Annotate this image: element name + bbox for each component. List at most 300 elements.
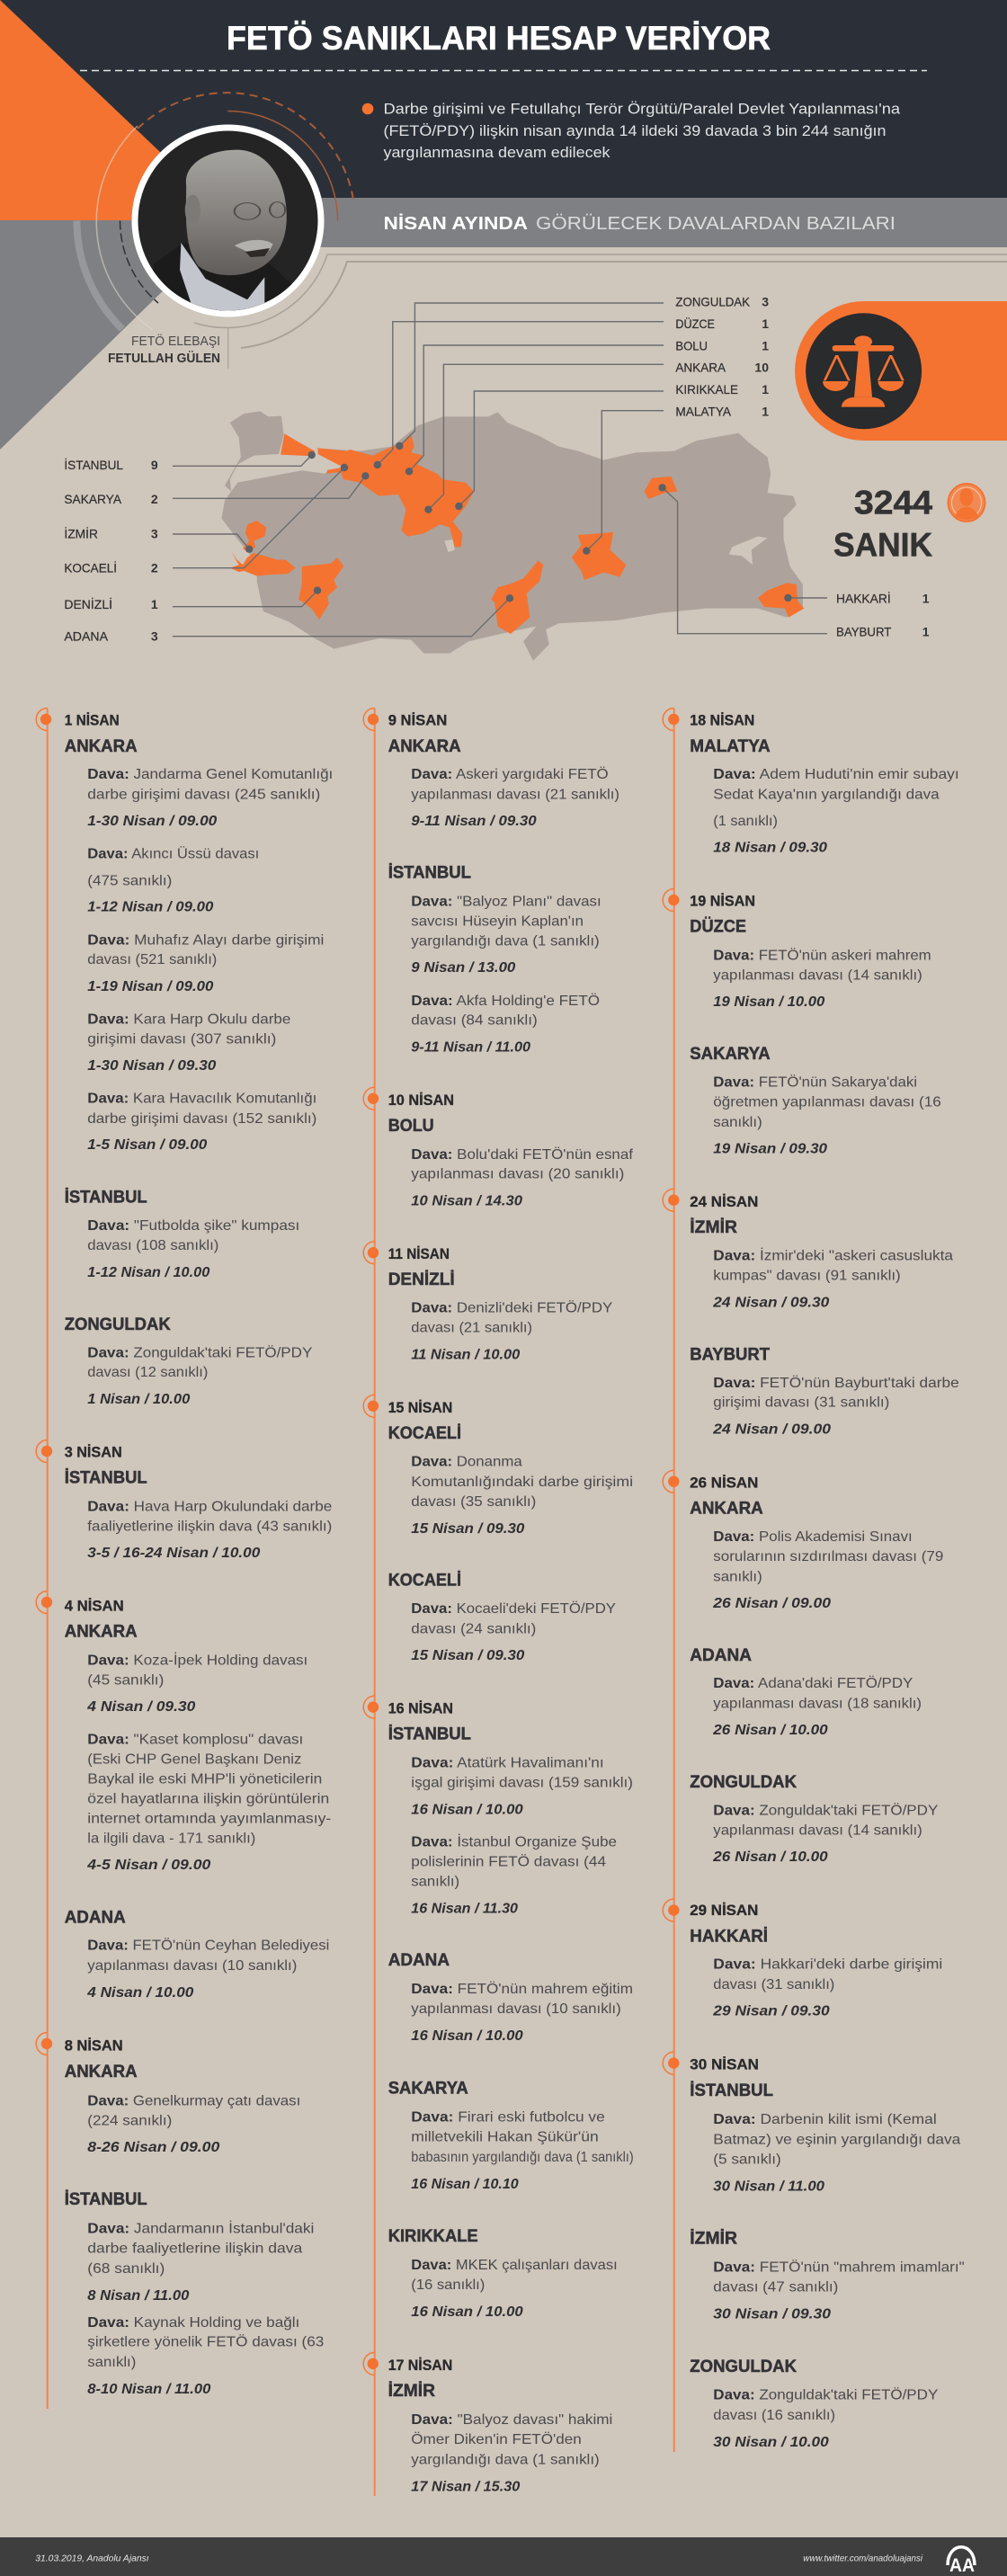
case: Dava: MKEK çalışanları davası: [411, 2258, 618, 2273]
city: Kocaeli: KOCAELİ: [388, 1424, 461, 1443]
case: yapılanması davası (18 sanıklı): [713, 1696, 922, 1712]
map leader lines: [173, 303, 827, 637]
date: 16 NİSAN: [388, 1699, 453, 1716]
caption: Fetullah Gülen: [108, 328, 228, 369]
case: Dava: Firari eski futbolcu ve: [411, 2109, 605, 2125]
case: Komutanlığındaki darbe girişimi: [411, 1475, 633, 1490]
case: davası (21 sanıklı): [411, 1321, 532, 1336]
timeline line: [673, 709, 675, 2452]
marker: [663, 1899, 680, 1921]
day: 4 Nisan: [36, 1591, 331, 2001]
legend: north provinces: BOLU: [675, 338, 708, 352]
date: 29 NİSAN: [690, 1902, 758, 1919]
case: 1-12 Nisan / 10.00: [87, 1265, 209, 1280]
city: Kocaeli: KOCAELİ: [388, 1571, 461, 1590]
case: yapılanması davası (14 sanıklı): [713, 968, 922, 984]
city: Zonguldak: ZONGULDAK: [690, 2358, 797, 2376]
case: [87, 1012, 290, 1074]
case: Dava: Kara Harp Okulu darbe: [87, 1012, 290, 1027]
marker: [36, 1440, 52, 1462]
case: Dava: FETÖ'nün "mahrem imamları": [713, 2260, 965, 2276]
case: [87, 932, 324, 994]
case: (16 sanıklı): [411, 2277, 485, 2293]
stat: 3244 sanık: 3244: [854, 485, 932, 521]
date: 15 NİSAN: [388, 1399, 452, 1416]
city: İstanbul: İSTANBUL: [388, 1725, 471, 1744]
case: [87, 1218, 299, 1280]
legend: west provinces: KOCAELİ: [64, 560, 117, 575]
case: [411, 1755, 633, 1817]
date: 30 NİSAN: [690, 2056, 759, 2073]
case: Dava: FETÖ'nün askeri mahrem: [713, 947, 931, 963]
case: (475 sanıklı): [87, 873, 172, 888]
intro text block: yargılanmasına devam edilecek: [383, 145, 610, 161]
legend: north provinces: 1: [762, 382, 769, 397]
case: 10 Nisan / 14.30: [411, 1194, 522, 1208]
case: davası (31 sanıklı): [713, 1977, 834, 1992]
city: Ankara: ANKARA: [65, 1622, 138, 1641]
intro text block: (FETÖ/PDY) ilişkin nisan ayında 14 ildeki 39 davada 3 bin 244 sanığın: [383, 123, 887, 139]
city: Bolu: BOLU: [388, 1117, 434, 1136]
legend: east provinces: BAYBURT: [836, 625, 892, 639]
city: İzmir: İZMİR: [690, 2229, 737, 2248]
icon: person: [948, 484, 985, 521]
case: 29 Nisan / 09.30: [712, 2003, 830, 2019]
case: [712, 1375, 959, 1438]
case: 17 Nisan / 15.30: [411, 2479, 520, 2494]
case: Dava: Hakkari'deki darbe girişimi: [713, 1957, 942, 1973]
case: [411, 2109, 634, 2192]
case: Dava: Polis Akademisi Sınavı: [713, 1529, 913, 1545]
case: Batmaz) ve eşinin yargılandığı dava: [713, 2132, 960, 2147]
case: Dava: "Balyoz davası" hakimi: [411, 2412, 612, 2428]
map of Turkey: [221, 411, 804, 661]
case: Dava: FETÖ'nün mahrem eğitim: [411, 1981, 633, 1997]
intro text block: [362, 102, 901, 161]
case: Dava: Donanma: [411, 1455, 522, 1470]
case: davası (24 sanıklı): [411, 1621, 536, 1636]
marker: [663, 1189, 680, 1211]
case: davası (35 sanıklı): [411, 1494, 536, 1510]
footer source: 31.03.2019, Anadolu Ajansı: [35, 2554, 149, 2564]
case: [87, 1344, 313, 1407]
case: Dava: "Futbolda şike" kumpası: [87, 1218, 299, 1234]
city: Adana: ADANA: [65, 1908, 126, 1927]
city: Ankara: ANKARA: [65, 737, 138, 756]
case: sorularının sızdırılması davası (79: [713, 1549, 943, 1564]
city: İstanbul: İSTANBUL: [690, 2081, 773, 2100]
case: 16 Nisan / 11.30: [411, 1902, 518, 1917]
case: Dava: Jandarmanın İstanbul'daki: [87, 2219, 314, 2236]
icon: scales of justice: [806, 313, 922, 429]
case: Dava: "Balyoz Planı" davası: [411, 894, 602, 910]
case: [86, 1651, 307, 1715]
case: [712, 1957, 942, 2019]
column 3 timeline: [663, 709, 965, 2452]
city: Ankara: ANKARA: [690, 1499, 763, 1518]
case: 1 Nisan / 10.00: [87, 1392, 190, 1407]
dashed divider: [80, 70, 927, 72]
legend: north provinces: 1: [762, 316, 769, 331]
date: 9 NİSAN: [388, 712, 447, 729]
case: [411, 1832, 617, 1917]
marker: [363, 1696, 379, 1718]
city: Adana: ADANA: [690, 1646, 752, 1665]
case: Dava: İstanbul Organize Şube: [411, 1832, 617, 1850]
case: Dava: Adana'daki FETÖ/PDY: [713, 1675, 913, 1691]
stat: 3244 sanık: [833, 484, 985, 563]
case: [87, 767, 333, 829]
day: 11 Nisan: [363, 1242, 613, 1363]
case: davası (16 sanıklı): [713, 2408, 835, 2423]
case: davası (108 sanıklı): [87, 1238, 218, 1253]
case: davası (84 sanıklı): [411, 1013, 538, 1029]
legend: north provinces: DÜZCE: [675, 316, 715, 331]
case: işgal girişimi davası (159 sanıklı): [411, 1775, 633, 1790]
case: yapılanması davası (10 sanıklı): [411, 2001, 621, 2017]
day: 29 Nisan: [663, 1899, 942, 2019]
legend: east provinces: [836, 591, 930, 639]
date: 17 NİSAN: [388, 2357, 452, 2374]
case: öğretmen yapılanması davası (16: [713, 1095, 941, 1110]
date: 3 NİSAN: [65, 1443, 122, 1460]
intro text block: Darbe girişimi ve Fetullahçı Terör Örgütü/Paralel Devlet Yapılanması'na: [383, 102, 901, 118]
case: Dava: Koza-İpek Holding davası: [87, 1651, 307, 1668]
city: Hakkari: HAKKARİ: [690, 1927, 768, 1946]
case: [411, 766, 619, 829]
date: 24 NİSAN: [690, 1193, 758, 1210]
marker: [363, 2352, 379, 2375]
legend: west provinces: İSTANBUL: [64, 457, 123, 472]
case: Dava: Genelkurmay çatı davası: [87, 2093, 300, 2108]
legend: north provinces: ANKARA: [675, 361, 726, 375]
case: 1-30 Nisan / 09.00: [87, 814, 217, 829]
case: 1-30 Nisan / 09.30: [87, 1058, 216, 1074]
legend: north provinces: 1: [762, 338, 769, 352]
legend: west provinces: 3: [151, 526, 158, 540]
case: Dava: Askeri yargıdaki FETÖ: [411, 766, 609, 782]
case: 24 Nisan / 09.00: [712, 1422, 831, 1438]
legend: west provinces: 2: [151, 492, 158, 506]
day: 17 Nisan: [363, 2352, 612, 2494]
case: 1-19 Nisan / 09.00: [87, 979, 213, 994]
case: 1-5 Nisan / 09.00: [87, 1137, 207, 1153]
case: 30 Nisan / 11.00: [713, 2179, 824, 2194]
legend: west provinces: 1: [151, 597, 158, 611]
case: 19 Nisan / 10.00: [713, 994, 824, 1010]
case: [713, 947, 931, 1010]
case: 26 Nisan / 09.00: [712, 1596, 831, 1611]
city: İstanbul: İSTANBUL: [65, 1469, 147, 1487]
case: 4 Nisan / 10.00: [86, 1985, 193, 2001]
legend: east provinces: 1: [922, 592, 930, 606]
case: Dava: Kaynak Holding ve bağlı: [87, 2315, 299, 2331]
case: Dava: Zonguldak'taki FETÖ/PDY: [87, 1344, 313, 1360]
case: yargılandığı dava (1 sanıklı): [411, 2453, 600, 2467]
case: Dava: İzmir'deki "askeri casuslukta: [713, 1246, 953, 1263]
date: 1 NİSAN: [65, 712, 120, 729]
icon: AA logo: AA: [949, 2555, 975, 2576]
city: İstanbul: İSTANBUL: [65, 1188, 147, 1207]
case: özel hayatlarına ilişkin görüntülerin: [87, 1791, 329, 1806]
case: şirketlere yönelik FETÖ davası (63: [87, 2334, 324, 2350]
case: 9-11 Nisan / 11.00: [411, 1039, 530, 1056]
date: 18 NİSAN: [690, 712, 754, 729]
case: [411, 894, 602, 976]
case: [712, 1246, 953, 1311]
legend: north provinces: MALATYA: [675, 404, 732, 418]
legend: north provinces: 3: [762, 295, 769, 309]
case: [411, 2258, 618, 2320]
case: Dava: Jandarma Genel Komutanlığı: [87, 767, 333, 782]
legend: east provinces: HAKKARİ: [836, 591, 891, 606]
marker: [36, 2032, 52, 2055]
case: la ilgili dava - 171 sanıklı): [87, 1831, 255, 1847]
case: Dava: "Kaset komplosu" davası: [87, 1733, 303, 1748]
day: 19 Nisan: [663, 888, 941, 1156]
city: İstanbul: İSTANBUL: [65, 2190, 147, 2209]
case: [713, 2260, 965, 2322]
day: 30 Nisan: [663, 2052, 965, 2450]
case: faaliyetlerine ilişkin dava (43 sanıklı): [87, 1520, 332, 1535]
marker: [663, 709, 680, 730]
case: Dava: Adem Huduti'nin emir subayı: [713, 767, 959, 782]
case: 19 Nisan / 09.30: [713, 1142, 827, 1156]
case: Dava: Darbenin kilit ismi (Kemal: [713, 2112, 937, 2127]
case: [411, 1146, 634, 1208]
legend: west provinces: 3: [151, 629, 158, 644]
case: Dava: Atatürk Havalimanı'nı: [411, 1755, 604, 1771]
case: [411, 1455, 633, 1537]
case: 4-5 Nisan / 09.00: [86, 1858, 210, 1873]
case: darbe girişimi davası (152 sanıklı): [87, 1111, 316, 1127]
map: Lake Van: [729, 537, 768, 565]
subtitle: GÖRÜLECEK DAVALARDAN BAZILARI: [536, 214, 896, 234]
grey left wedge: [0, 220, 252, 450]
date: 4 NİSAN: [65, 1597, 124, 1614]
case: kumpas" davası (91 sanıklı): [713, 1269, 901, 1284]
city: İzmir: İZMİR: [388, 2382, 435, 2401]
date: 26 NİSAN: [690, 1474, 758, 1491]
day: 3 Nisan: [36, 1440, 332, 1561]
date: 11 NİSAN: [388, 1245, 450, 1262]
city: Kırıkkale: KIRIKKALE: [388, 2227, 478, 2246]
subtitle: [383, 213, 896, 234]
case: 9-11 Nisan / 09.30: [411, 814, 537, 829]
case: 4 Nisan / 09.30: [86, 1699, 195, 1715]
legend: west provinces: SAKARYA: [64, 492, 122, 506]
case: 11 Nisan / 10.00: [411, 1347, 520, 1363]
marker: [36, 1591, 52, 1613]
case: Dava: FETÖ'nün Sakarya'daki: [713, 1074, 917, 1090]
city: Ankara: ANKARA: [388, 737, 461, 756]
date: 10 NİSAN: [388, 1092, 454, 1109]
marker: [36, 709, 51, 730]
case: [411, 993, 600, 1056]
decorative rings: [76, 93, 1007, 348]
day: 24 Nisan: [663, 1189, 959, 1438]
city: Adana: ADANA: [388, 1951, 450, 1970]
case: yapılanması davası (14 sanıklı): [713, 1823, 922, 1838]
header dark panel: [0, 0, 1007, 198]
case: [713, 2387, 939, 2450]
map location dots: [245, 442, 792, 602]
orange corner triangle: [0, 0, 232, 220]
marker: [663, 888, 680, 912]
case: 16 Nisan / 10.00: [411, 2304, 523, 2320]
case: [87, 2093, 300, 2155]
legend: north provinces: ZONGULDAK: [675, 295, 751, 309]
case: 3-5 / 16-24 Nisan / 10.00: [87, 1546, 260, 1561]
case: [411, 2412, 612, 2494]
column 2 timeline: [363, 709, 634, 2496]
case: Dava: Denizli'deki FETÖ/PDY: [411, 1300, 613, 1316]
caption: Fetullah Gülen: FETÖ ELEBAŞI: [131, 333, 220, 349]
case: Dava: Muhafız Alayı darbe girişimi: [87, 932, 324, 948]
day: 18 Nisan: [663, 709, 959, 856]
legend: north provinces: 1: [762, 404, 769, 418]
timeline line: [47, 709, 49, 2409]
case: [712, 1529, 943, 1611]
case: sanıklı): [713, 1569, 762, 1584]
case: Dava: Bolu'daki FETÖ'nün esnaf: [411, 1146, 634, 1163]
map: Anatolia land: [221, 412, 803, 661]
legend: west provinces: İZMİR: [64, 525, 98, 540]
case: 8-10 Nisan / 11.00: [87, 2382, 210, 2397]
stat: 3244 sanık: SANIK: [833, 526, 932, 563]
case: [87, 2315, 324, 2397]
case: (5 sanıklı): [713, 2153, 781, 2168]
case: Dava: FETÖ'nün Bayburt'taki darbe: [713, 1375, 959, 1391]
city: Bayburt: BAYBURT: [690, 1345, 770, 1364]
case: [87, 845, 259, 915]
case: [713, 767, 959, 856]
case: internet ortamında yayımlanmasıy-: [87, 1812, 331, 1827]
case: 16 Nisan / 10.00: [411, 2028, 523, 2044]
case: [712, 1675, 922, 1738]
case: 15 Nisan / 09.30: [411, 1521, 524, 1537]
case: darbe faaliyetlerine ilişkin dava: [87, 2242, 302, 2257]
case: 18 Nisan / 09.30: [713, 841, 827, 856]
case: [87, 2219, 314, 2304]
case: Dava: Zonguldak'taki FETÖ/PDY: [713, 1803, 939, 1819]
case: sanıklı): [713, 1115, 762, 1130]
case: sanıklı): [87, 2355, 136, 2370]
case: Dava: Akfa Holding'e FETÖ: [411, 993, 600, 1009]
case: girişimi davası (31 sanıklı): [713, 1395, 889, 1411]
case: Baykal ile eski MHP'li yöneticilerin: [87, 1771, 322, 1787]
case: [411, 1981, 633, 2044]
day: 26 Nisan: [663, 1470, 943, 1865]
case: 16 Nisan / 10.10: [411, 2177, 519, 2192]
city: Zonguldak: ZONGULDAK: [690, 1773, 797, 1792]
case: [87, 1499, 332, 1561]
case: davası (47 sanıklı): [713, 2280, 838, 2295]
day: 10 Nisan: [363, 1087, 634, 1208]
case: (68 sanıklı): [87, 2261, 165, 2277]
legend: east provinces: 1: [922, 625, 930, 639]
legend: west provinces: ADANA: [64, 629, 109, 644]
marker: [663, 2052, 680, 2074]
title: FETÖ SANIKLARI HESAP VERİYOR: [227, 20, 771, 57]
day: 9 Nisan: [363, 709, 619, 1056]
case: darbe girişimi davası (245 sanıklı): [87, 787, 320, 802]
timeline line: [374, 709, 376, 2496]
case: polislerinin FETÖ davası (44: [411, 1853, 606, 1869]
case: 8-26 Nisan / 09.00: [87, 2140, 219, 2155]
case: Sedat Kaya'nın yargılandığı dava: [713, 787, 940, 802]
day: 8 Nisan: [36, 2032, 324, 2397]
case: [411, 1600, 616, 1663]
case: 8 Nisan / 11.00: [87, 2288, 189, 2304]
case: Dava: Kocaeli'deki FETÖ/PDY: [411, 1600, 616, 1617]
city: İzmir: İZMİR: [690, 1218, 737, 1237]
city: Ankara: ANKARA: [65, 2063, 138, 2081]
case: davası (521 sanıklı): [87, 952, 217, 967]
case: 1-12 Nisan / 09.00: [87, 900, 213, 915]
case: (224 sanıklı): [87, 2113, 172, 2128]
day: 15 Nisan: [363, 1395, 633, 1663]
case: yapılanması davası (20 sanıklı): [411, 1167, 624, 1182]
case: Ömer Diken'in FETÖ'den: [411, 2431, 582, 2447]
case: [87, 1092, 316, 1153]
legend: north provinces: KIRIKKALE: [675, 382, 738, 397]
footer bar: [0, 2537, 1007, 2576]
city: Sakarya: SAKARYA: [388, 2079, 468, 2099]
marker: [363, 709, 379, 730]
case: [86, 1938, 329, 2001]
map: Thrace land: [225, 411, 284, 492]
case: savcısı Hüseyin Kaplan'ın: [411, 914, 584, 929]
icon: AA logo: [948, 2547, 975, 2576]
city: Zonguldak: ZONGULDAK: [65, 1315, 171, 1334]
marker: [363, 1242, 379, 1264]
marker: [663, 1470, 680, 1493]
case: [411, 1300, 613, 1363]
case: Dava: FETÖ'nün Ceyhan Belediyesi: [87, 1938, 329, 1954]
grey subtitle band: [0, 198, 1007, 247]
day: 16 Nisan: [363, 1696, 634, 2320]
legend: north provinces: 10: [754, 361, 769, 375]
marker: [363, 1395, 379, 1417]
case: milletvekili Hakan Şükür'ün: [411, 2130, 599, 2145]
city: Sakarya: SAKARYA: [690, 1045, 771, 1064]
case: [86, 1733, 331, 1873]
case: 15 Nisan / 09.30: [411, 1648, 524, 1663]
case: 26 Nisan / 10.00: [712, 1850, 828, 1865]
date: 8 NİSAN: [65, 2037, 123, 2055]
day: 1 Nisan: [36, 709, 333, 1407]
case: Dava: Kara Havacılık Komutanlığı: [87, 1092, 316, 1107]
case: babasının yargılandığı dava (1 sanıklı): [411, 2150, 634, 2165]
case: (45 sanıklı): [87, 1673, 164, 1689]
city: Düzce: DÜZCE: [690, 917, 746, 937]
case: Dava: Akıncı Üssü davası: [87, 845, 259, 861]
legend: west provinces: 9: [151, 458, 158, 472]
case: 9 Nisan / 13.00: [411, 960, 515, 976]
subtitle: NİSAN AYINDA: [383, 213, 528, 234]
case: Dava: Hava Harp Okulundaki darbe: [87, 1499, 332, 1514]
map: highlighted provinces: [230, 433, 804, 634]
legend: west provinces: DENİZLİ: [64, 596, 112, 611]
case: [713, 1074, 941, 1156]
case: (1 sanıklı): [713, 814, 778, 829]
case: (Eski CHP Genel Başkanı Deniz: [87, 1752, 301, 1768]
caption: Fetullah Gülen: FETULLAH GÜLEN: [108, 351, 220, 366]
case: davası (12 sanıklı): [87, 1365, 208, 1380]
case: [713, 2112, 960, 2194]
marker: [363, 1087, 379, 1110]
